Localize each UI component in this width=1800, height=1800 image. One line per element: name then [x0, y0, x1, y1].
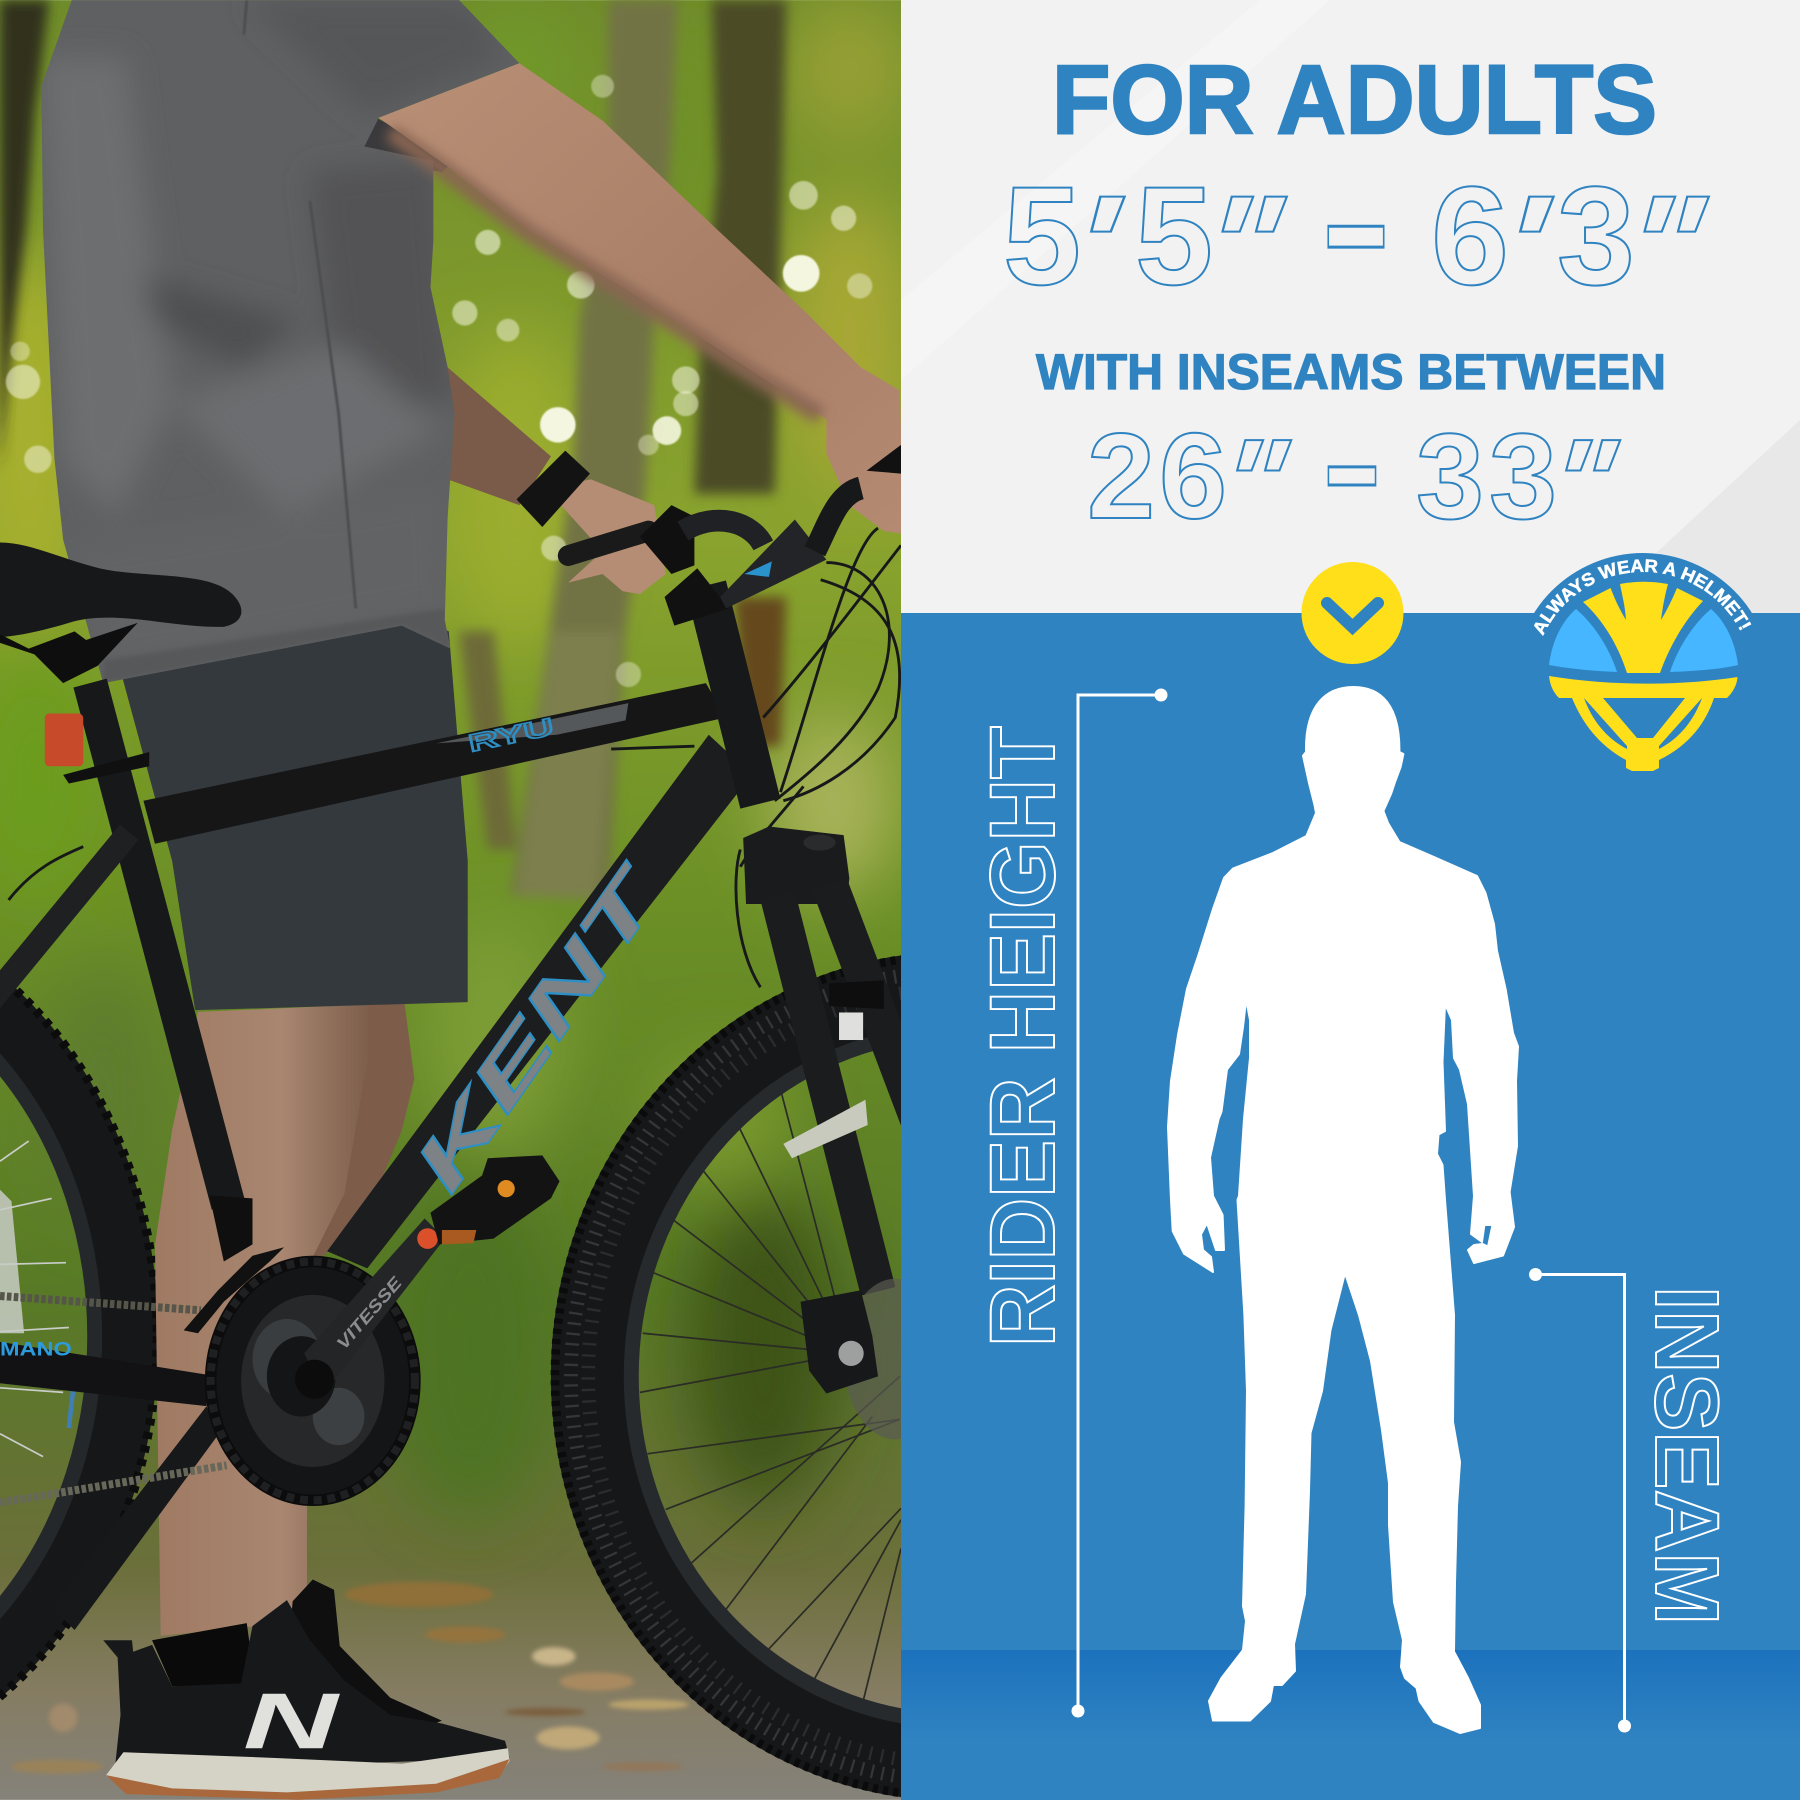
rider silhouette: [1168, 687, 1518, 1733]
height range: 5'5" - 6'3": ": [1180, 166, 1307, 323]
inseam range: 26" - 33": 3: [1416, 408, 1484, 544]
bike: down tube: KENT: [398, 851, 680, 1206]
subheading: with inseams between: WITH INSEAMS BETWEEN: [1036, 344, 1666, 400]
tree trunks: [0, 0, 786, 900]
person: lower leg: [155, 1004, 367, 1636]
height range: 5'5" - 6'3": ': [1049, 167, 1144, 323]
person: far arm and hand: [448, 367, 666, 594]
icon: helmet badge: ALWAYS WEAR A HELMET!: [1534, 559, 1752, 636]
person: sock: [152, 1623, 255, 1686]
panel: bike photo: [0, 0, 901, 1800]
person: front shoe: N: [243, 1676, 341, 1765]
gravel path with leaves: [11, 1582, 689, 1773]
inseam range: 26" - 33": 3: [1489, 408, 1557, 544]
height range: 5'5" - 6'3": 3: [1557, 157, 1635, 314]
icon: helmet badge: [1534, 553, 1752, 771]
bike: rear reflector light: [45, 713, 83, 766]
inseam range: 26" - 33": ": [1530, 413, 1638, 550]
person: grey t-shirt: [40, 0, 519, 683]
inseam range: 26" - 33": –: [1326, 359, 1378, 564]
bike: top tube: [143, 683, 726, 844]
forest background: [0, 0, 912, 1800]
inseam range: 26" - 33": [1087, 359, 1638, 564]
height range: 5'5" - 6'3": –: [1325, 103, 1387, 338]
person: shorts: [118, 608, 468, 1010]
measure line: rider height: [1072, 688, 1168, 1718]
heading: for adults: FOR ADULTS: [1052, 45, 1657, 154]
label: inseam: INSEAM: [1636, 1286, 1736, 1625]
inseam range: 26" - 33": 6: [1159, 408, 1227, 544]
person: near arm and hand: [379, 63, 904, 534]
bike: fork and brake: [743, 827, 947, 1439]
bike: head tube, stem and handlebar: [568, 445, 901, 804]
inseam range: 26" - 33": 2: [1087, 408, 1155, 544]
height range: 5'5" - 6'3": ": [1602, 166, 1729, 323]
bike: cables: [9, 528, 901, 987]
bike: front wheel: [555, 956, 1356, 1797]
label: rider height: RIDER HEIGHT: [972, 726, 1074, 1347]
person: front shoe: [103, 1600, 510, 1800]
person: back leg: [310, 1003, 414, 1263]
bike: down tube: [327, 735, 752, 1268]
inseam range: 26" - 33": ": [1201, 413, 1309, 550]
bike: seat tube and rear stays: MANO: [0, 1339, 72, 1361]
panel: blue lower section: [901, 613, 1800, 1800]
bike: top tube: RYU: [466, 713, 556, 758]
height range: 5'5" - 6'3": 5: [1135, 157, 1213, 314]
person: sleeve shadow: [362, 109, 453, 172]
height range: 5'5" - 6'3": ': [1478, 167, 1573, 323]
height range: 5'5" - 6'3": 5: [1003, 157, 1081, 314]
bike: seat tube and rear stays: [0, 683, 228, 1630]
icon: yellow chevron badge: [1302, 562, 1404, 664]
bike: drivetrain: VITESSE: [332, 1272, 406, 1353]
measure line: inseam: [1529, 1268, 1631, 1732]
height range: 5'5" - 6'3": 6: [1431, 157, 1509, 314]
height range: 5'5" - 6'3": [1003, 103, 1729, 338]
bike: drivetrain: [0, 1155, 560, 1503]
bokeh highlights: [6, 75, 872, 687]
person: rear shoe: [287, 1579, 442, 1761]
panel: light header background: [901, 0, 1800, 614]
rear wheel: [0, 894, 157, 1779]
bike: saddle: [0, 542, 241, 784]
